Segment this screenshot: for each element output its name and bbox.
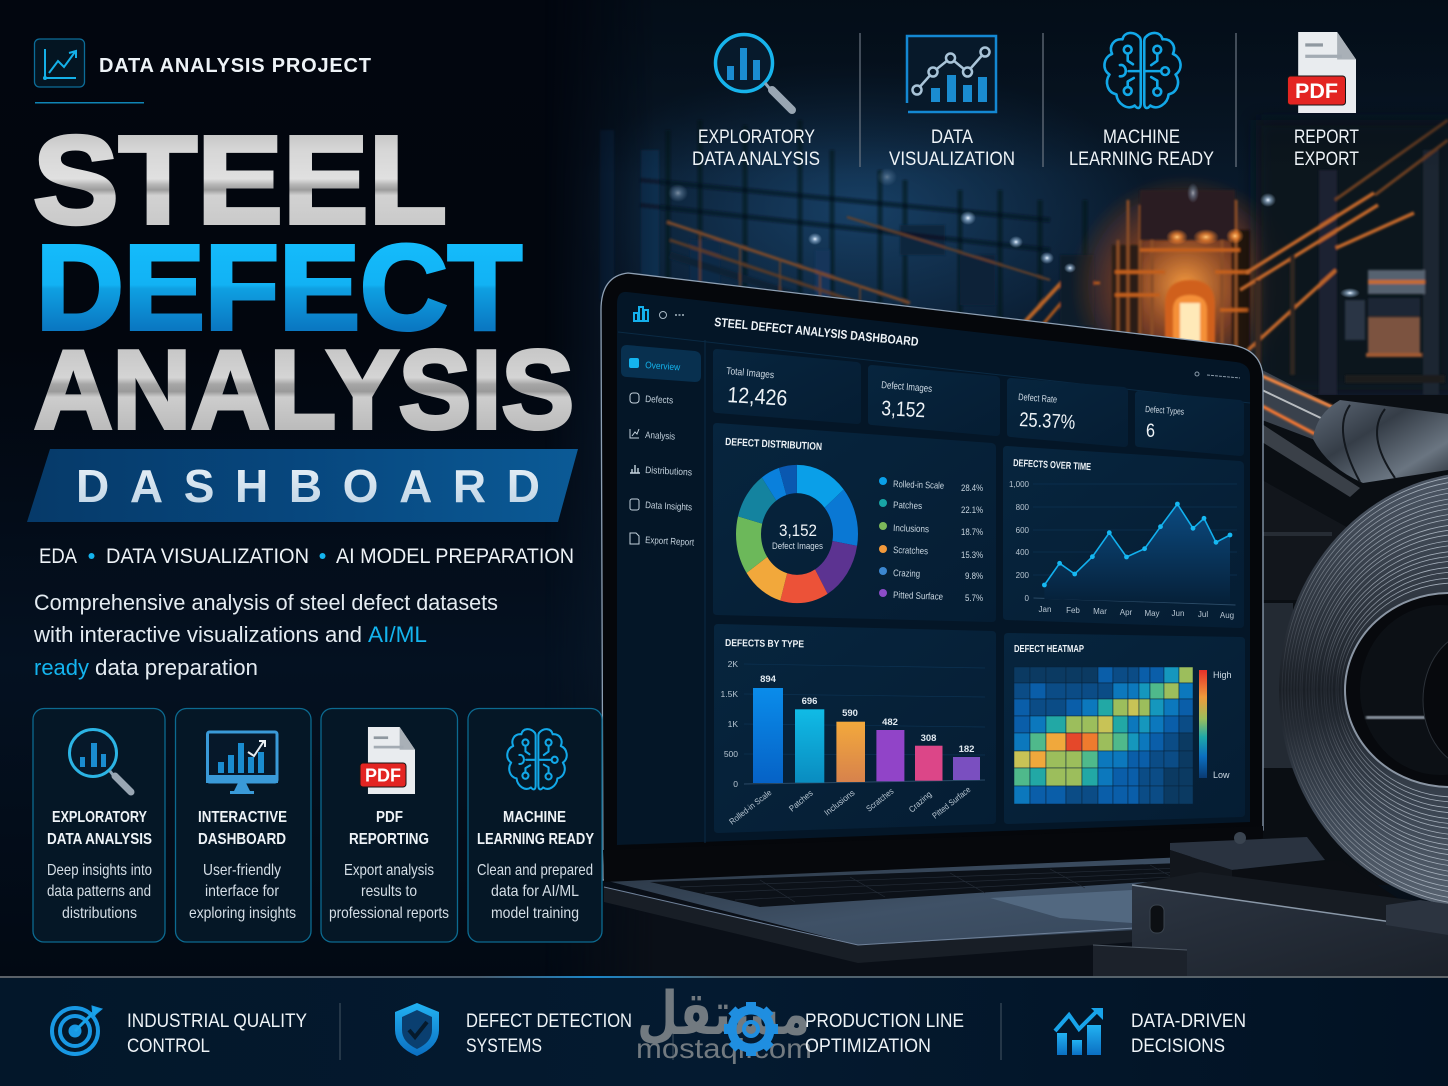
- bar chart: 590: [842, 708, 858, 719]
- line chart: Jun: [1172, 609, 1184, 618]
- donut legend: 9.8%: [965, 571, 983, 582]
- top feature: data visualization: VISUALIZATION: [889, 149, 1015, 170]
- card: exploratory data analysis: Deep insights into: [47, 862, 152, 879]
- bar chart: Inclusions: [822, 788, 857, 818]
- panel: defect distribution: DEFECT DISTRIBUTION: [725, 436, 822, 453]
- KPI: defect rate: 25.37%: [1019, 409, 1076, 434]
- KPI: total images: 12,426: [727, 382, 788, 411]
- donut legend: Patches: [893, 500, 922, 512]
- bar chart: 482: [882, 717, 898, 728]
- sidebar navigation: Export Report: [645, 535, 695, 549]
- bar chart: 2K: [728, 659, 738, 669]
- top feature: machine learning ready: LEARNING READY: [1069, 149, 1214, 170]
- tagline: DATA VISUALIZATION: [106, 545, 309, 568]
- donut chart: 3,152: [779, 521, 817, 540]
- card: interactive dashboard: DASHBOARD: [198, 831, 286, 848]
- card: pdf reporting: professional reports: [329, 905, 449, 922]
- card: pdf reporting: REPORTING: [349, 831, 429, 848]
- card: exploratory data analysis: data patterns and: [47, 883, 151, 900]
- bar chart: [720, 659, 985, 827]
- header: project label: DATA ANALYSIS PROJECT: [99, 55, 371, 77]
- top feature: data visualization: DATA: [931, 127, 973, 148]
- footer item: defect detection systems: [395, 1003, 632, 1057]
- background: factory scene: [574, 0, 1448, 798]
- footer item: production line optimization: [724, 1002, 964, 1057]
- donut legend: Scratches: [893, 545, 928, 557]
- second coil: [1313, 400, 1448, 483]
- donut legend: 5.7%: [965, 593, 983, 604]
- description paragraph: data preparation: [95, 655, 258, 680]
- KPI: defect rate: [1007, 378, 1128, 447]
- KPI: defect types: [1135, 391, 1244, 456]
- top bar divider: [618, 332, 1250, 403]
- top feature: data visualization: [889, 36, 1015, 170]
- top feature: machine learning ready: MACHINE: [1103, 127, 1180, 148]
- description paragraph: ready: [34, 655, 90, 680]
- icon: magnifier: [70, 730, 131, 792]
- card: pdf reporting: [321, 708, 458, 942]
- main title: ANALYSIS: [34, 328, 574, 452]
- icon: magnifier: [716, 34, 792, 110]
- KPI: total images: [713, 349, 861, 424]
- big steel coil: [1279, 472, 1448, 908]
- panel: defect distribution: [713, 423, 996, 622]
- main title: STEEL: [33, 111, 447, 250]
- footer item: industrial quality control: CONTROL: [127, 1036, 210, 1057]
- card: pdf reporting: PDF: [376, 809, 403, 826]
- donut legend: 15.3%: [961, 550, 983, 561]
- steel support beam: [1093, 885, 1448, 976]
- line chart: May: [1144, 609, 1160, 618]
- panel: defect heatmap: DEFECT HEATMAP: [1014, 644, 1084, 655]
- KPI: defect types: 6: [1146, 421, 1155, 442]
- rolling mill bed: [1255, 395, 1448, 885]
- watermark: mostaql: mostaql.com: [636, 1033, 812, 1064]
- KPI: defect images: Defect Images: [881, 380, 932, 395]
- description paragraph: [33, 590, 498, 680]
- icon: brain: [1104, 33, 1181, 108]
- footer item: production line optimization: OPTIMIZATION: [805, 1036, 931, 1057]
- heatmap color scale: High: [1213, 670, 1232, 680]
- icon: rising chart: [1055, 1008, 1103, 1055]
- card: interactive dashboard: exploring insights: [189, 905, 296, 922]
- line chart: Jul: [1198, 610, 1208, 619]
- tagline: [39, 545, 574, 568]
- bar chart: Scratches: [864, 786, 895, 814]
- line chart: Apr: [1120, 608, 1133, 617]
- icon: shield: [395, 1003, 439, 1056]
- footer item: defect detection systems: DEFECT DETECTION: [466, 1011, 632, 1032]
- card: machine learning ready: MACHINE: [503, 809, 566, 826]
- description paragraph: Comprehensive analysis of steel defect datasets: [34, 590, 498, 615]
- description paragraph: AI/ML: [368, 622, 427, 647]
- line chart: Aug: [1220, 611, 1234, 620]
- laptop lid: [601, 273, 1263, 880]
- laptop base: [604, 855, 1210, 963]
- banner: dashboard: DASHBOARD: [76, 460, 540, 512]
- heatmap grid: [1014, 667, 1193, 804]
- donut legend: Inclusions: [893, 523, 929, 535]
- panel: defects over time: DEFECTS OVER TIME: [1013, 458, 1092, 473]
- line chart: 200: [1016, 571, 1030, 580]
- watermark: mostaql: [636, 980, 812, 1064]
- banner: dashboard: [27, 449, 578, 522]
- header: project label: [34, 39, 371, 104]
- panel: defect heatmap: [1004, 633, 1245, 824]
- KPI: total images: Total Images: [726, 366, 775, 381]
- sidebar navigation: Defects: [645, 394, 674, 406]
- sidebar navigation: [621, 345, 701, 549]
- card: interactive dashboard: interface for: [205, 883, 280, 900]
- bar chart: Crazing: [907, 789, 934, 814]
- line chart: Jan: [1039, 605, 1051, 614]
- bar chart: 1.5K: [720, 689, 738, 699]
- top right status: [1195, 372, 1240, 378]
- card: exploratory data analysis: distributions: [62, 905, 137, 922]
- card: exploratory data analysis: [33, 708, 165, 942]
- sidebar navigation: Distributions: [645, 465, 693, 478]
- footer item: defect detection systems: SYSTEMS: [466, 1036, 542, 1057]
- KPI: defect rate: Defect Rate: [1018, 392, 1057, 406]
- line chart: 0: [1025, 594, 1030, 603]
- icon: pdf document: PDF: [365, 766, 401, 786]
- donut legend: 22.1%: [961, 505, 983, 516]
- top feature: machine learning ready: [1069, 33, 1214, 170]
- donut chart: Defect Images: [772, 541, 823, 552]
- footer item: industrial quality control: [52, 1006, 307, 1057]
- donut legend: Crazing: [893, 568, 920, 580]
- bar chart: 696: [802, 696, 817, 707]
- icon: pdf document: [360, 727, 415, 794]
- icon: target: [52, 1006, 102, 1054]
- card: exploratory data analysis: EXPLORATORY: [52, 809, 147, 826]
- donut chart: [748, 479, 846, 589]
- top bar logo: [634, 307, 685, 321]
- line chart: 400: [1016, 548, 1030, 557]
- KPI: defect images: 3,152: [881, 397, 926, 422]
- right structure: [1256, 120, 1448, 395]
- card: interactive dashboard: User-friendly: [203, 862, 281, 879]
- line chart: 800: [1016, 503, 1030, 512]
- heatmap color scale: Low: [1213, 770, 1230, 780]
- main title: [33, 111, 574, 452]
- line chart: [1009, 480, 1237, 620]
- icon: gear: [724, 1002, 778, 1056]
- floor: [520, 880, 1160, 977]
- card: machine learning ready: Clean and prepared: [477, 862, 593, 879]
- sidebar navigation: Analysis: [645, 430, 676, 443]
- main title: DEFECT: [36, 219, 522, 355]
- bar chart: 182: [959, 744, 974, 755]
- tagline: AI MODEL PREPARATION: [336, 545, 574, 568]
- icon: monitor: [206, 732, 278, 794]
- donut legend: Rolled-in Scale: [893, 479, 944, 492]
- top feature: report export: [1288, 32, 1359, 170]
- sidebar navigation: Data Insights: [645, 500, 693, 513]
- icon: pdf document: PDF: [1295, 80, 1338, 103]
- footer item: data-driven decisions: DATA-DRIVEN: [1131, 1011, 1246, 1032]
- laptop screen: [601, 273, 1263, 882]
- icon: brain: [507, 729, 567, 789]
- footer item: data-driven decisions: DECISIONS: [1131, 1036, 1225, 1057]
- top feature: exploratory data analysis: EXPLORATORY: [698, 127, 815, 148]
- bar chart: Patches: [787, 788, 815, 814]
- card: interactive dashboard: [176, 708, 311, 942]
- card: machine learning ready: [468, 708, 602, 942]
- bar chart: 0: [733, 779, 738, 789]
- card: pdf reporting: Export analysis: [344, 862, 434, 879]
- top feature: report export: EXPORT: [1294, 149, 1359, 170]
- steel support plate: [1132, 832, 1448, 930]
- top feature: exploratory data analysis: [692, 34, 820, 170]
- card: pdf reporting: results to: [361, 883, 417, 900]
- screen background: [617, 292, 1250, 845]
- card: machine learning ready: model training: [491, 905, 579, 922]
- line chart: Mar: [1093, 607, 1107, 616]
- bar chart: Rolled-in Scale: [727, 787, 774, 827]
- tagline: EDA: [39, 545, 77, 568]
- KPI: defect types: Defect Types: [1145, 404, 1185, 417]
- panel: defects by type: DEFECTS BY TYPE: [725, 638, 804, 650]
- footer bar: [0, 976, 1448, 1086]
- card: exploratory data analysis: DATA ANALYSIS: [47, 831, 152, 848]
- donut legend: [879, 477, 983, 604]
- line chart: 600: [1016, 526, 1030, 535]
- card: machine learning ready: data for AI/ML: [491, 883, 579, 900]
- bar chart: 500: [724, 749, 738, 759]
- top feature: exploratory data analysis: DATA ANALYSIS: [692, 149, 820, 170]
- card: machine learning ready: LEARNING READY: [477, 831, 594, 848]
- sidebar navigation: Overview: [645, 360, 681, 373]
- donut legend: 18.7%: [961, 527, 983, 538]
- icon: chart frame: [907, 36, 996, 112]
- card: interactive dashboard: INTERACTIVE: [198, 809, 287, 826]
- bar chart: 894: [760, 674, 777, 685]
- donut legend: Pitted Surface: [893, 590, 943, 603]
- donut legend: 28.4%: [961, 483, 983, 494]
- footer item: data-driven decisions: [1055, 1008, 1246, 1057]
- description paragraph: with interactive visualizations and: [33, 622, 362, 647]
- bar chart: 308: [921, 733, 936, 744]
- dashboard title: STEEL DEFECT ANALYSIS DASHBOARD: [714, 315, 919, 349]
- top feature: report export: REPORT: [1294, 127, 1359, 148]
- bar chart: 1K: [728, 719, 738, 729]
- panel: defects over time: [1003, 446, 1244, 628]
- line chart: Feb: [1066, 606, 1080, 615]
- furnace: [1074, 180, 1268, 354]
- footer item: production line optimization: PRODUCTION LINE: [805, 1011, 964, 1032]
- bar chart: Pitted Surface: [930, 784, 973, 821]
- line chart: 1,000: [1009, 480, 1030, 489]
- heatmap color scale: [1199, 670, 1232, 780]
- panel: defects by type: [714, 624, 996, 833]
- watermark: mostaql: مستقل: [637, 980, 810, 1047]
- KPI: defect images: [868, 365, 1000, 436]
- footer item: industrial quality control: INDUSTRIAL QUALITY: [127, 1011, 307, 1032]
- icon: line chart badge: [34, 39, 84, 87]
